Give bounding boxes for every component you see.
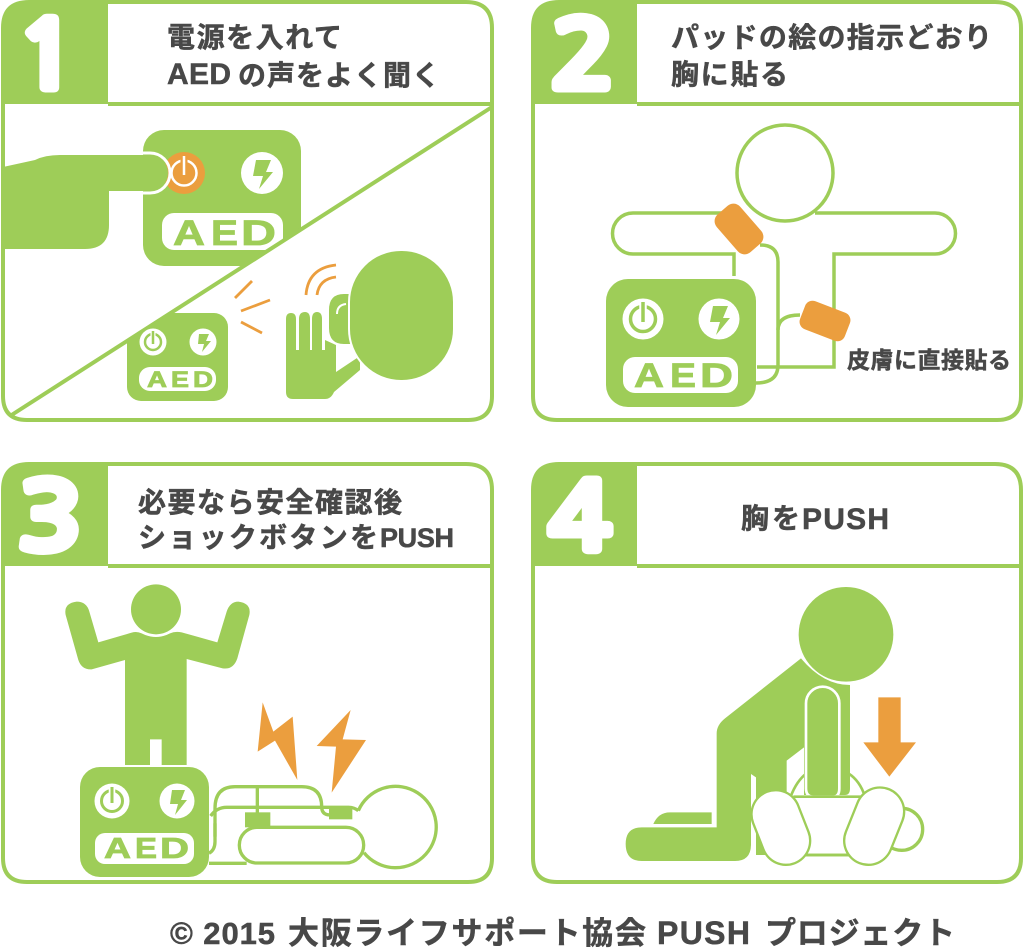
step 4 number block (533, 464, 637, 566)
push arrow (863, 697, 916, 777)
AED device pressed: A (173, 214, 205, 253)
rescuer's rear foot (653, 812, 712, 824)
step 4 number block: 4 (548, 472, 612, 564)
rescuer body (626, 658, 850, 861)
step 4 heading: 胸を (741, 503, 800, 534)
AED device: E (135, 833, 157, 865)
step 1 number block (3, 2, 108, 104)
step 1 number block: 1 (16, 10, 78, 102)
AED device: E (670, 357, 696, 395)
AED device pressed: D (241, 214, 276, 253)
AED device: D (160, 833, 189, 865)
lightning bolts (258, 702, 366, 793)
step 4 heading: PUSH (802, 503, 889, 536)
AED device (606, 279, 756, 407)
panel: step 1 (3, 2, 492, 420)
step 2 number block (533, 2, 637, 104)
step 3 heading: PUSH (380, 523, 454, 553)
icon: sound lines (235, 265, 336, 333)
rescuer standing clear (65, 584, 250, 765)
upper pad (711, 200, 767, 258)
rescuer arm (806, 687, 839, 797)
icon: listener head (328, 250, 454, 381)
step 2 number block: 2 (550, 10, 616, 102)
panel: step 3 (3, 464, 492, 882)
patient head (881, 808, 923, 850)
panel 4 frame (533, 464, 1021, 882)
compressions figure (626, 587, 923, 861)
lower pad (797, 298, 853, 344)
step 1 heading: AED (167, 58, 231, 91)
AED device pressed (143, 130, 301, 266)
panel 2 frame (533, 2, 1021, 420)
AED device speaking: A (147, 367, 167, 392)
AED device speaking: E (171, 367, 189, 392)
AED device pressed: E (211, 214, 238, 253)
step 3 number block (3, 464, 108, 566)
skin label: 皮膚に直接貼る (847, 347, 1011, 373)
chest line (793, 797, 862, 855)
patient chest (791, 773, 865, 855)
AED device (80, 767, 209, 877)
step 1 heading: の声をよく聞く (238, 60, 440, 91)
patient lying with pads and cables (209, 786, 436, 868)
AED device speaking (127, 313, 228, 401)
AED device speaking: D (193, 367, 213, 392)
patient right knee (868, 812, 880, 841)
diagonal divider (10, 107, 492, 416)
step 3 heading: ショックボタンを (138, 522, 378, 553)
panel 1 frame (3, 2, 492, 420)
patient outline (612, 125, 955, 383)
AED device: D (700, 357, 733, 395)
step 3 heading: 必要なら安全確認後 (138, 487, 402, 518)
icon: pointing hand (3, 153, 170, 249)
panel 3 frame (3, 464, 492, 882)
panel: step 4 (533, 464, 1021, 882)
step 2 heading: パッドの絵の指示どおり (671, 22, 992, 53)
panel: step 2 (533, 2, 1021, 420)
step 2 heading: 胸に貼る (671, 59, 788, 90)
step 3 number block: 3 (17, 472, 83, 564)
AED device: A (634, 357, 664, 395)
rescuer head (799, 587, 893, 682)
step 1 heading: 電源を入れて (167, 22, 342, 53)
patient left knee (776, 814, 786, 841)
AED device: A (104, 833, 131, 865)
icon: hand cupped to ear (286, 312, 360, 399)
